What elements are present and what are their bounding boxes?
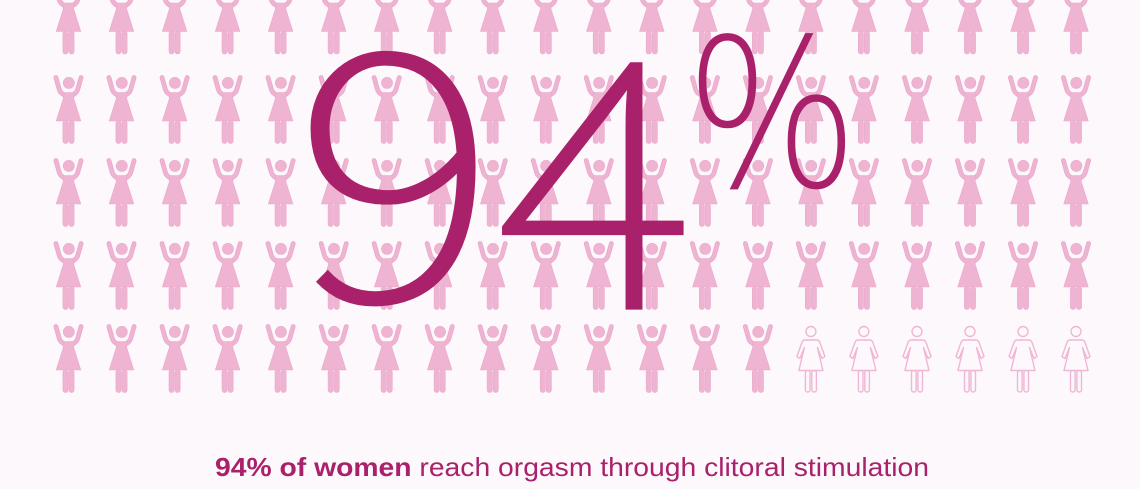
row 3: women with raised arms bbox=[56, 160, 1089, 226]
row 2: women with raised arms bbox=[56, 77, 1089, 144]
row 4: women with raised arms bbox=[56, 243, 1089, 310]
row 5: 14 raised-arm women and 6 outlined women bbox=[56, 326, 1090, 392]
pictogram grid: 94 of 100 women bbox=[56, 0, 1090, 393]
caption: 94% of women reach orgasm through clitoral stimulation bbox=[215, 452, 929, 482]
big number: 94% bbox=[294, 0, 853, 408]
row 1: women with raised arms bbox=[56, 0, 1089, 54]
